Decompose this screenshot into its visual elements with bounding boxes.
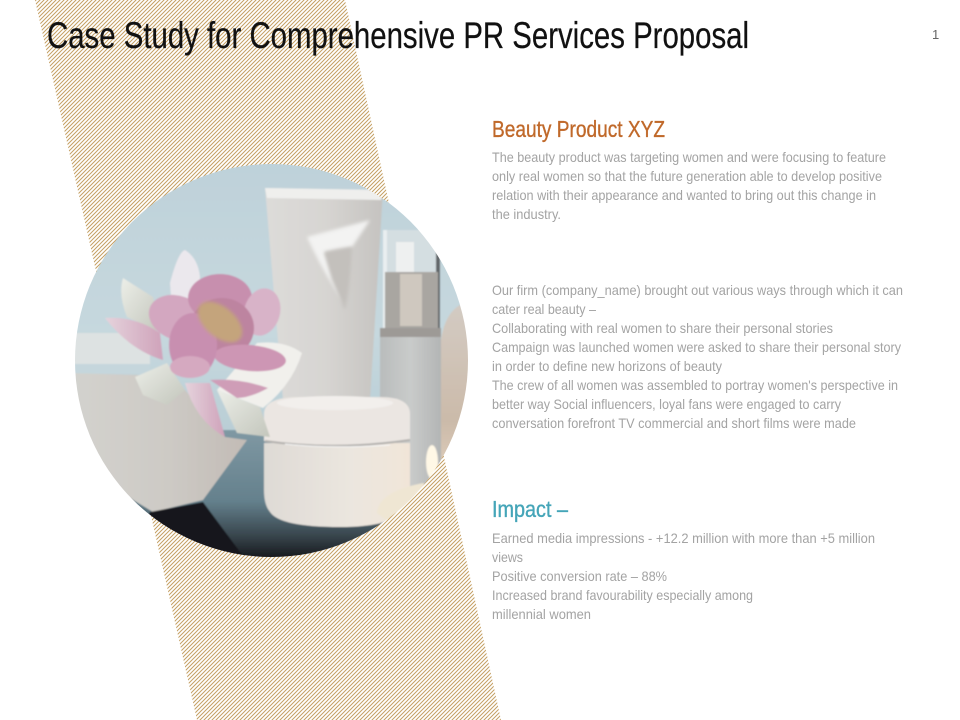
text block: firm approach: better way Social influencers, loyal fans were engaged to carry	[492, 396, 841, 412]
bowl inner cone petal	[217, 342, 302, 408]
beige blurred object at right	[440, 305, 468, 461]
white cosmetic tube	[265, 188, 383, 400]
white bowl	[70, 373, 247, 512]
photo backdrop	[77, 164, 460, 431]
text block: firm approach: Campaign was launched women were asked to share their personal story	[492, 339, 901, 355]
paragraph: product background: The beauty product was targeting women and were focusing to feature	[492, 149, 886, 165]
text block: firm approach: in order to define new horizons of beauty	[492, 358, 722, 374]
bowl reflection on table	[148, 502, 242, 554]
lotus flower	[105, 250, 287, 437]
dark reflective table	[130, 430, 384, 557]
text block: firm approach: Collaborating with real women to share their personal stories	[492, 320, 833, 336]
white tray at left	[75, 332, 150, 364]
text block: firm approach: cater real beauty –	[492, 301, 596, 317]
impact results list: Positive conversion rate – 88%	[492, 568, 667, 584]
circular product photo	[70, 160, 475, 560]
text block: firm approach: Our firm (company_name) brought out various ways through which it can	[492, 282, 903, 298]
heading: Beauty Product XYZ: Beauty Product XYZ	[492, 116, 665, 142]
impact results list: views	[492, 549, 523, 565]
hatched diagonal band	[35, 0, 501, 720]
cream jar	[264, 396, 410, 527]
impact results list	[492, 530, 875, 622]
text block: firm approach	[492, 282, 903, 431]
paragraph: product background	[492, 149, 886, 222]
paragraph: product background: only real women so that the future generation able to develop positive	[492, 168, 882, 184]
text block: beauty product	[492, 116, 886, 222]
candle	[378, 444, 439, 516]
impact results list: millennial women	[492, 606, 591, 622]
text block: firm approach: The crew of all women was assembled to portray women's perspective in	[492, 377, 898, 393]
text block: firm approach: conversation forefront TV commercial and short films were made	[492, 415, 856, 431]
impact results list: Earned media impressions - +12.2 million with more than +5 million	[492, 530, 875, 546]
heading: Impact: Impact –	[492, 496, 568, 522]
pump bottle	[380, 230, 441, 490]
paragraph: product background: the industry.	[492, 206, 561, 222]
paragraph: product background: relation with their appearance and wanted to bring out this change in	[492, 187, 876, 203]
text block: impact	[492, 496, 875, 622]
impact results list: Increased brand favourability especially among	[492, 587, 753, 603]
page number: 1	[932, 27, 939, 42]
title: Case Study for Comprehensive PR Services Proposal	[47, 15, 749, 56]
